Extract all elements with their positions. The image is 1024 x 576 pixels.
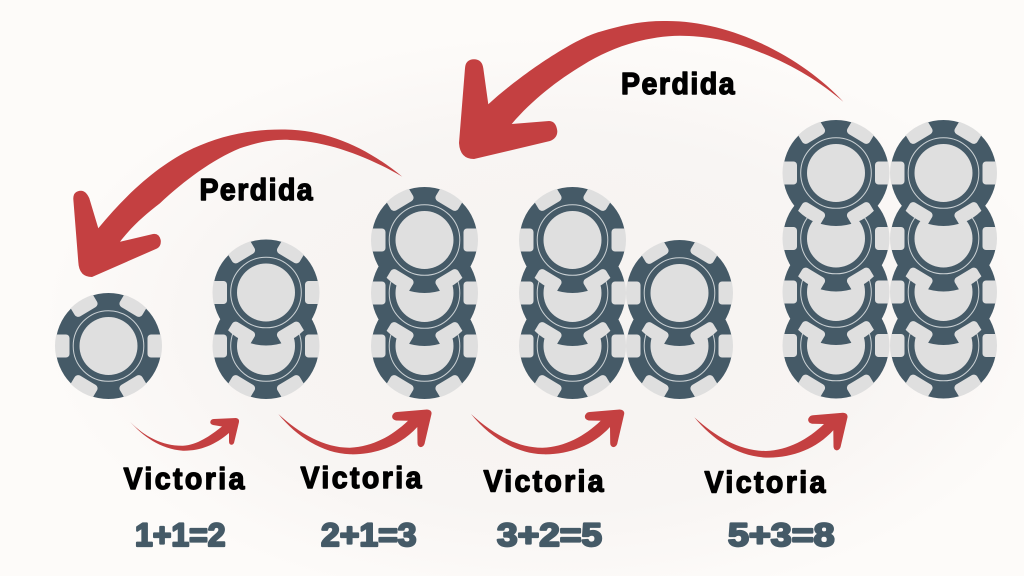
arrow: large loss arrow pointing to three-chip stack — [459, 21, 843, 159]
label: Victoria 3: Victoria — [484, 464, 604, 499]
arrow: win 3 — [471, 410, 624, 454]
arrow: small loss arrow pointing to first chip — [73, 129, 402, 277]
arrow: win 1 — [130, 418, 239, 451]
chip stack: four chips (eight group, right) — [884, 115, 1002, 404]
equation: 2+1=3: 2+1=3 — [321, 517, 416, 553]
equation: 5+3=8: 5+3=8 — [728, 517, 834, 553]
chip: single (1) — [50, 288, 168, 404]
chip stack: two chips — [207, 234, 325, 404]
arrow: win 4 — [694, 413, 848, 458]
label: Victoria 4: Victoria — [704, 465, 826, 500]
equation: 1+1=2: 1+1=2 — [135, 517, 226, 553]
chip stack: two chips (five group, right) — [620, 235, 738, 404]
chip stack: three chips — [366, 182, 484, 404]
label: Victoria 2: Victoria — [300, 461, 422, 495]
arrow: win 2 — [278, 410, 432, 454]
label: Perdida (small arrow): Perdida — [200, 173, 313, 207]
chip stack: three chips (five group, left) — [514, 182, 632, 404]
chip stack: four chips (eight group, left) — [777, 115, 895, 404]
equation: 3+2=5: 3+2=5 — [497, 517, 602, 553]
label: Perdida (large arrow): Perdida — [621, 67, 735, 101]
label: Victoria 1: Victoria — [124, 462, 245, 496]
